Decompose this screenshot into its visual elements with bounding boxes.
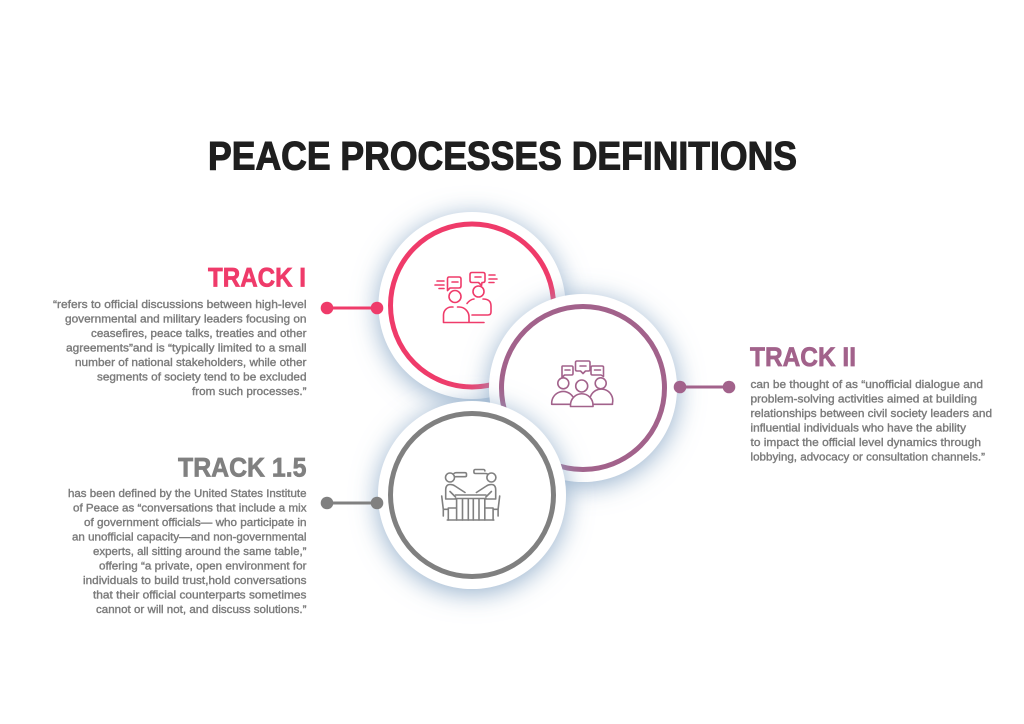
- text block: track i definition: [53, 299, 307, 398]
- circle: track ii: [489, 294, 677, 482]
- text block: track i definition: agreements”and is “typically limited to a small: [66, 342, 306, 354]
- text block: track 1.5 definition: an unofficial capacity—and non-governmental: [72, 532, 306, 544]
- connector: track ii: [674, 381, 735, 393]
- text block: track ii definition: relationships between civil society leaders and: [750, 408, 992, 420]
- text block: track ii definition: [750, 379, 992, 464]
- text block: track 1.5 definition: has been defined by the United States Institute: [68, 488, 306, 500]
- text block: track 1.5 definition: that their official counterparts sometimes: [93, 590, 307, 602]
- icon: two people talking: [435, 272, 497, 322]
- text block: track 1.5 definition: offering “a private, open environment for: [99, 560, 307, 572]
- text block: track 1.5 definition: experts, all sitting around the same table,”: [93, 546, 307, 558]
- connector: track i: [321, 302, 383, 314]
- text block: track ii definition: influential individuals who have the ability: [750, 422, 967, 434]
- text block: track i definition: from such processes.”: [192, 386, 307, 398]
- icon: two people at a table: [442, 470, 500, 520]
- connector: track 1.5: [321, 497, 383, 509]
- panel: track 1.5 text: [68, 452, 383, 616]
- text block: track i definition: segments of society tend to be excluded: [97, 372, 306, 384]
- text block: track ii definition: problem-solving activities aimed at building: [750, 394, 977, 406]
- circle: track 1.5: [378, 401, 566, 589]
- text block: track 1.5 definition: of government officials— who participate in: [84, 517, 306, 529]
- text block: track i definition: ceasefires, peace talks, treaties and other: [91, 328, 307, 340]
- heading: track 1.5: TRACK 1.5: [178, 452, 306, 482]
- text block: track ii definition: lobbying, advocacy or consultation channels.”: [750, 452, 985, 464]
- icon: group of three people with speech bubbles: [552, 361, 613, 406]
- text block: track ii definition: can be thought of as “unofficial dialogue and: [750, 379, 983, 391]
- title: PEACE PROCESSES DEFINITIONS: [208, 134, 797, 178]
- text block: track ii definition: to impact the official level dynamics through: [750, 437, 981, 449]
- text block: track 1.5 definition: individuals to build trust,hold conversations: [83, 575, 307, 587]
- text block: track i definition: “refers to official discussions between high-level: [53, 299, 306, 311]
- text block: track 1.5 definition: of Peace as “conversations that include a mix: [73, 502, 307, 514]
- text block: track 1.5 definition: [68, 488, 307, 616]
- panel: track ii text: [674, 342, 992, 464]
- heading: track ii: TRACK II: [750, 342, 856, 372]
- circle: track i: [378, 212, 566, 399]
- text block: track i definition: number of national stakeholders, while other: [75, 357, 307, 369]
- heading: track i: TRACK I: [208, 262, 306, 292]
- text block: track 1.5 definition: cannot or will not, and discuss solutions.”: [96, 604, 307, 616]
- text block: track i definition: governmental and military leaders focusing on: [65, 314, 306, 326]
- panel: track i text: [53, 262, 383, 398]
